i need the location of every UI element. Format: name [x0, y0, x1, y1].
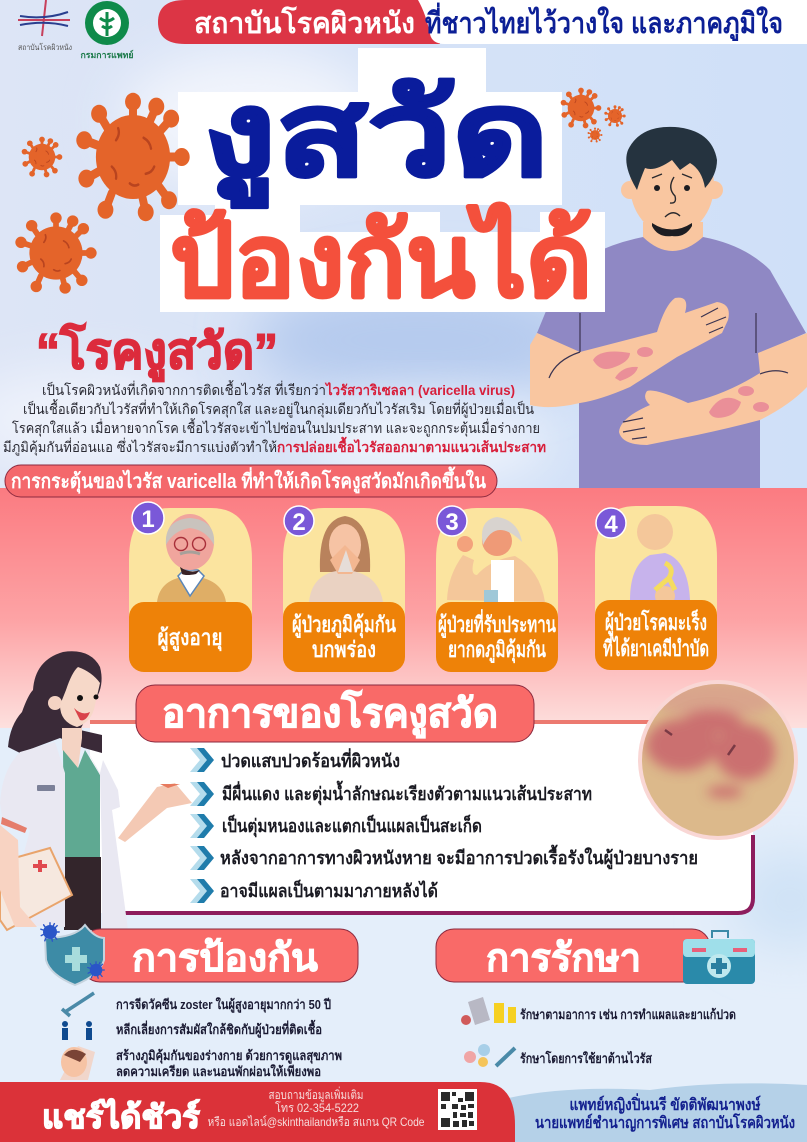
title: ป้องกันได้: [170, 203, 592, 318]
intro paragraph: เป็นโรคผิวหนังที่เกิดจากการติดเชื้อไวรัส ที่เรียกว่า: [42, 380, 326, 398]
prevention list: สร้างภูมิคุ้มกันของร่างกาย ด้วยการดูแลสุขภาพ: [116, 1048, 342, 1064]
symptoms heading: [136, 685, 534, 742]
prevention list: ลดความเครียด และนอนพักผ่อนให้เพียงพอ: [116, 1063, 321, 1079]
intro paragraph: เป็นเชื้อเดียวกับไวรัสที่ทำให้เกิดโรคสุกใส และอยู่ในกลุ่มเดียวกับไวรัสเริม โดยที่ผู้ป่วยเมื่อเป็น: [23, 399, 534, 418]
icon: distancing people: [62, 1021, 92, 1040]
footer: share bar: สอบถามข้อมูลเพิ่มเติม: [268, 1086, 364, 1103]
card 3: immunosuppressant: ผู้ป่วยที่รับประทาน: [438, 608, 556, 639]
treatment list: รักษาโดยการใช้ยาต้านไวรัส: [520, 1050, 652, 1066]
card 2: low immunity: ผู้ป่วยภูมิคุ้มกัน: [292, 612, 396, 639]
card 3: immunosuppressant: ยากดภูมิคุ้มกัน: [448, 637, 546, 664]
title: [160, 48, 605, 318]
card 3: immunosuppressant: 3: [445, 509, 459, 536]
treatment heading: [436, 929, 710, 982]
prevention heading: [82, 929, 358, 982]
logo: department of medical services: กรมการแพทย์: [80, 49, 134, 60]
card 1: elderly: [129, 502, 252, 672]
footer: share bar: แชร์ได้ชัวร์: [42, 1098, 200, 1135]
virus icons: [15, 88, 626, 294]
card 3: immunosuppressant: [436, 506, 558, 672]
card 1: elderly: 1: [141, 506, 155, 533]
title: งูสวัด: [203, 69, 549, 208]
footer: share bar: หรือ แอดไลน์@skinthailandหรือ สแกน QR Code: [208, 1115, 425, 1129]
trigger heading pill: [5, 465, 497, 497]
logo: department of medical services: [80, 1, 134, 60]
icon: first-aid kit: [683, 931, 755, 984]
QR code: [438, 1089, 477, 1130]
prevention list: [60, 993, 342, 1080]
illustration: man with rash: [530, 127, 807, 488]
card 4: cancer chemo: ผู้ป่วยโรคมะเร็ง: [605, 608, 707, 637]
prevention heading: การป้องกัน: [132, 937, 318, 980]
icon: shield: [41, 923, 104, 985]
footer: share bar: [0, 1082, 515, 1142]
logo: institute of dermatology: [18, 0, 72, 52]
symptoms heading: อาการของโรคงูสวัด: [162, 690, 498, 738]
illustration: doctor: [0, 651, 192, 930]
header banner: [158, 0, 807, 44]
subheading: โรคงูสวัด: “โรคงูสวัด”: [36, 322, 278, 382]
card 4: cancer chemo: ที่ได้ยาเคมีบำบัด: [603, 632, 709, 661]
rash photo: [638, 680, 798, 840]
icon: sleeping person: [60, 1046, 95, 1080]
header banner: สถาบันโรคผิวหนัง: [194, 5, 415, 40]
intro paragraph: การปล่อยเชื้อไวรัสออกมาตามแนวเส้นประสาท: [277, 436, 546, 455]
symptom list: ปวดแสบปวดร้อนที่ผิวหนัง: [221, 748, 400, 771]
symptom list: [190, 748, 698, 903]
treatment heading: การรักษา: [486, 937, 641, 980]
symptom list: อาจมีแผลเป็นตามมาภายหลังได้: [220, 879, 438, 901]
intro paragraph: ไวรัสวาริเซลลา (varicella virus): [324, 381, 515, 398]
footer: share bar: โทร 02-354-5222: [275, 1101, 359, 1115]
footer: doctor credit background and names: [500, 1083, 807, 1142]
symptom list: เป็นตุ่มหนองและแตกเป็นแผลเป็นสะเก็ด: [222, 814, 482, 838]
card 2: low immunity: บกพร่อง: [312, 637, 376, 662]
intro paragraph: โรคสุกใสแล้ว เมื่อหายจากโรค เชื้อไวรัสจะเข้าไปซ่อนในปมประสาท และจะถูกกระตุ้นเมื่อร่างกาย: [12, 418, 540, 437]
card 1: elderly: ผู้สูงอายุ: [158, 625, 222, 652]
trigger heading pill: การกระตุ้นของไวรัส varicella ที่ทำให้เกิดโรคงูสวัดมักเกิดขึ้นใน: [11, 466, 486, 495]
footer: doctor credit background and names: แพทย์หญิงปิ่นนรี ขัตติพัฒนาพงษ์: [570, 1093, 761, 1115]
icon: syringe: [62, 993, 94, 1016]
card 2: low immunity: [283, 506, 405, 672]
treatment list: [461, 997, 736, 1067]
treatment list: รักษาตามอาการ เช่น การทำแผลและยาแก้ปวด: [520, 1007, 736, 1022]
prevention list: หลีกเลี่ยงการสัมผัสใกล้ชิดกับผู้ป่วยที่ติดเชื้อ: [116, 1019, 322, 1038]
intro paragraph: มีภูมิคุ้มกันที่อ่อนแอ ซึ่งไวรัสจะมีการแบ่งตัวทำให้: [3, 438, 277, 456]
symptom list: มีผื่นแดง และตุ่มน้ำลักษณะเรียงตัวตามแนวเส้นประสาท: [222, 780, 592, 806]
card 2: low immunity: 2: [292, 509, 306, 536]
icon: medicine: [461, 997, 516, 1025]
card 4: cancer chemo: [595, 506, 717, 670]
prevention list: การจีดวัคซีน zoster ในผู้สูงอายุมากกว่า 50 ปี: [116, 996, 331, 1013]
symptom list: หลังจากอาการทางผิวหนังหาย จะมีอาการปวดเรื้อรังในผู้ป่วยบางราย: [220, 844, 698, 870]
card 4: cancer chemo: 4: [604, 511, 618, 538]
icon: pills and syringe: [464, 1044, 515, 1067]
logo: institute of dermatology: สถาบันโรคผิวหนัง: [18, 42, 72, 52]
intro paragraph: [3, 380, 546, 456]
panel: symptoms: [90, 685, 753, 913]
